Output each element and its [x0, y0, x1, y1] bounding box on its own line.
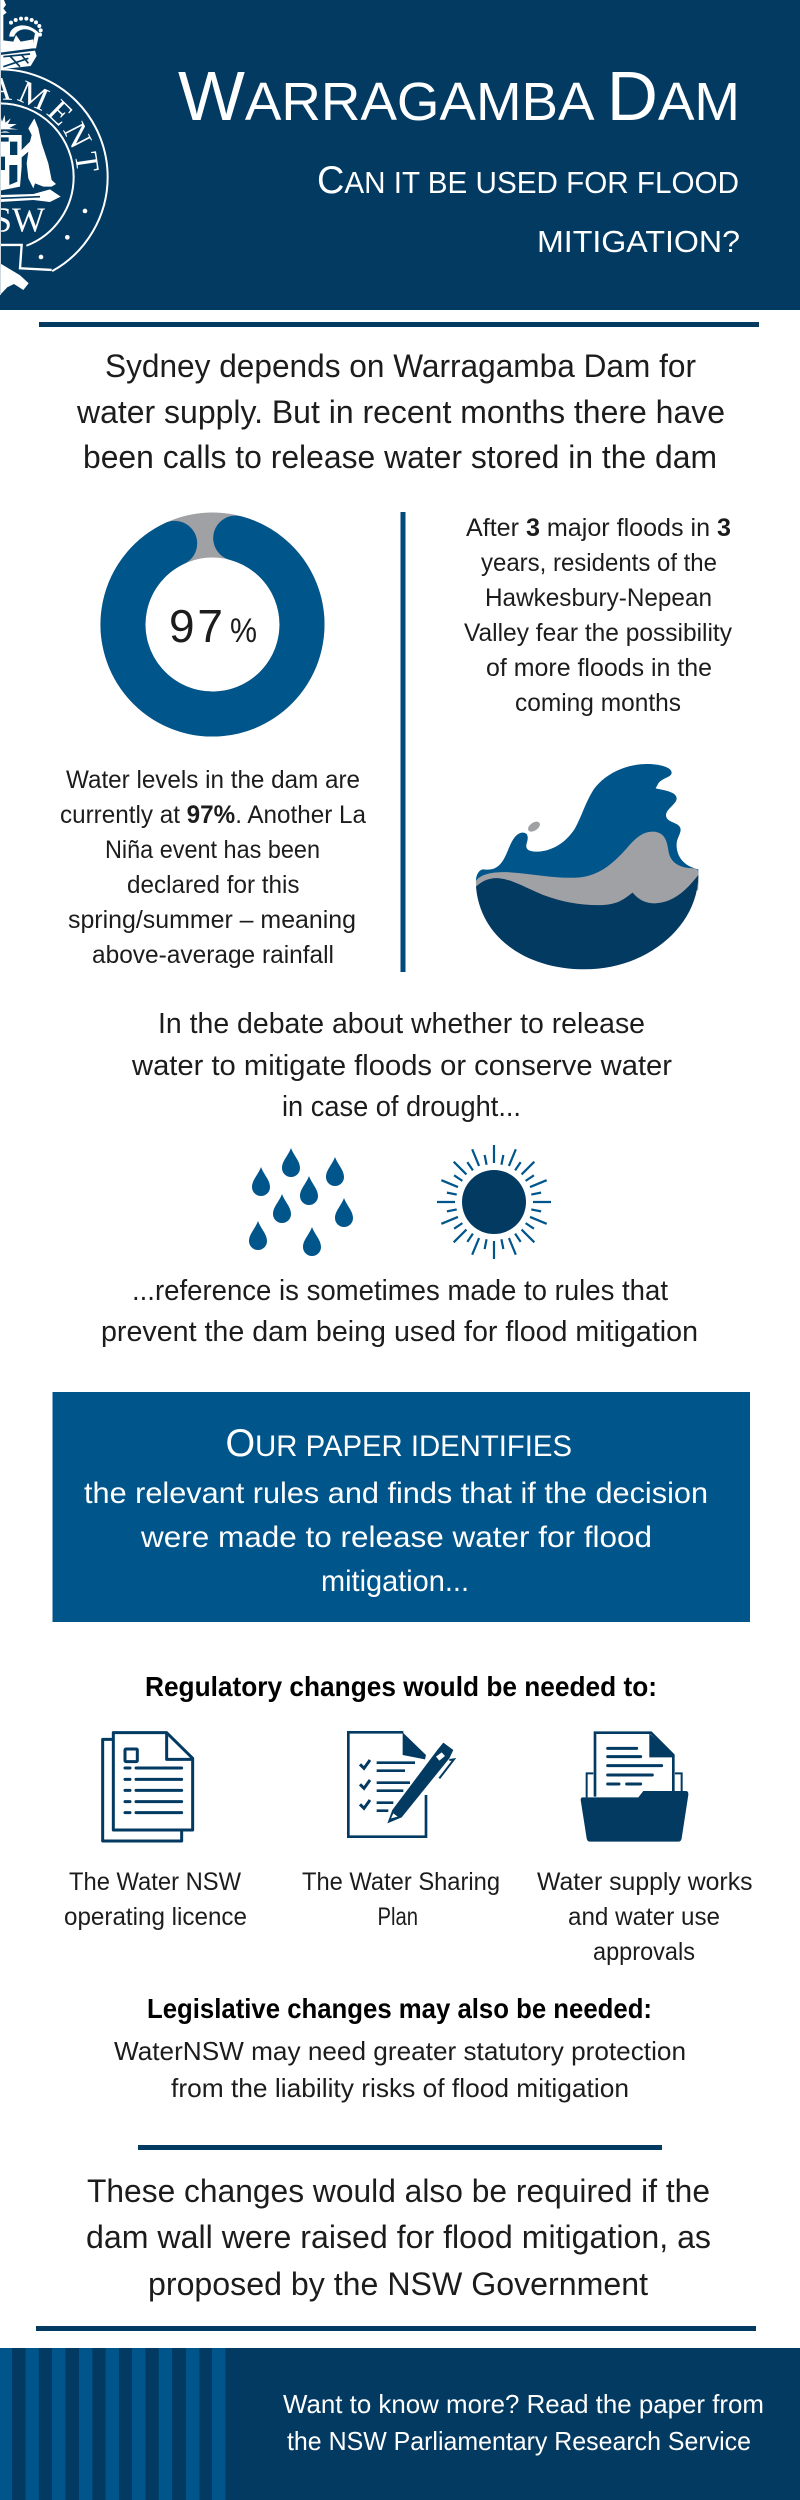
chart: 97% donut: 97 [169, 600, 223, 652]
text: operating licence [64, 1868, 247, 1931]
crown [0, 35, 37, 69]
panel text: were made to release water for flood [140, 1521, 652, 1554]
footer text: Want to know more? Read the paper from [283, 2389, 764, 2419]
subtitle: MITIGATION? [537, 224, 740, 259]
text: major floods [464, 514, 732, 717]
panel text [84, 1477, 708, 1598]
divider rule [39, 322, 759, 327]
text: major floods: coming months [515, 689, 681, 717]
text: dam wall raising: dam wall were raised for flood mitigation, as [86, 2219, 711, 2255]
text: statutory protection [114, 2036, 686, 2103]
intro text [76, 348, 725, 475]
heading: legislative changes: Legislative changes may also be needed: [147, 1993, 652, 2024]
icon: checklist and pen [348, 1732, 454, 1837]
intro text: been calls to release water stored in the dam [83, 439, 717, 475]
text: water levels: above-average rainfall [92, 941, 334, 969]
divider rule [138, 2145, 662, 2150]
chart: 97% donut [123, 535, 302, 714]
text: statutory protection: WaterNSW may need greater statutory protection [114, 2036, 686, 2066]
text: operating licence: operating licence [64, 1903, 247, 1931]
footer text [283, 2389, 764, 2456]
icon: wave [476, 764, 699, 969]
subtitle [317, 159, 740, 259]
text: water levels [60, 766, 366, 969]
text: rules reference: prevent the dam being used for flood mitigation [101, 1316, 698, 1348]
text: operating licence: The Water NSW [69, 1868, 241, 1896]
text: water levels: spring/summer – meaning [68, 906, 356, 934]
text: debate: In the debate about whether to release [158, 1008, 645, 1040]
text: rules reference [101, 1275, 698, 1348]
text: water sharing plan [302, 1868, 500, 1931]
text: statutory protection: from the liability risks of flood mitigation [171, 2073, 629, 2103]
panel text: mitigation... [321, 1565, 469, 1598]
heading: regulatory changes: Regulatory changes would be needed to: [145, 1671, 657, 1702]
panel text: the relevant rules and finds that if the decision [84, 1477, 708, 1510]
divider rule [36, 2326, 756, 2331]
text: major floods: After 3 major floods in 3 [466, 514, 731, 542]
intro text: water supply. But in recent months there have [76, 394, 725, 430]
subtitle: CAN IT BE USED FOR FLOOD [317, 159, 739, 202]
text: debate: water to mitigate floods or conserve water [131, 1050, 672, 1082]
panel: header banner [0, 0, 800, 310]
panel: our paper identifies [52, 1392, 750, 1622]
text: water sharing plan: Plan [378, 1903, 418, 1931]
icon: rain drops [249, 1148, 353, 1256]
vertical divider [400, 512, 406, 972]
text: debate [131, 1008, 672, 1123]
footer stripes [0, 2348, 225, 2500]
panel: footer [0, 2348, 800, 2500]
text: debate: in case of drought... [282, 1091, 521, 1123]
panel heading: OUR PAPER IDENTIFIES [226, 1422, 572, 1465]
text: works and approvals [537, 1868, 752, 1966]
text: works and approvals: and water use [568, 1903, 720, 1931]
text: works and approvals: Water supply works [537, 1868, 752, 1896]
icon: parliament crest [0, 0, 109, 295]
text: dam wall raising: These changes would also be required if the [87, 2173, 710, 2209]
text: rules reference: ...reference is sometimes made to rules that [132, 1275, 668, 1307]
text: water levels: Water levels in the dam are [66, 766, 360, 794]
title: WARRAGAMBA DAM [178, 57, 740, 135]
text: water levels: currently at 97%. Another La [60, 801, 366, 829]
text: major floods: years, residents of the [481, 549, 717, 577]
chart: 97% donut: % [230, 612, 257, 650]
text: works and approvals: approvals [593, 1938, 695, 1966]
text: major floods: Hawkesbury-Nepean [485, 584, 712, 612]
icon: folder with documents [581, 1733, 688, 1842]
text: water levels: Niña event has been [105, 836, 320, 864]
intro text: Sydney depends on Warragamba Dam for [105, 348, 696, 384]
icon: licence document [103, 1733, 193, 1841]
text: dam wall raising [86, 2173, 711, 2302]
text: major floods: Valley fear the possibility [464, 619, 732, 647]
text: major floods: of more floods in the [486, 654, 712, 682]
text: water levels: declared for this [127, 871, 300, 899]
icon: sun [437, 1145, 551, 1259]
footer text: the NSW Parliamentary Research Service [287, 2426, 751, 2456]
text: water sharing plan: The Water Sharing [302, 1868, 500, 1896]
text: dam wall raising: proposed by the NSW Government [148, 2266, 648, 2302]
